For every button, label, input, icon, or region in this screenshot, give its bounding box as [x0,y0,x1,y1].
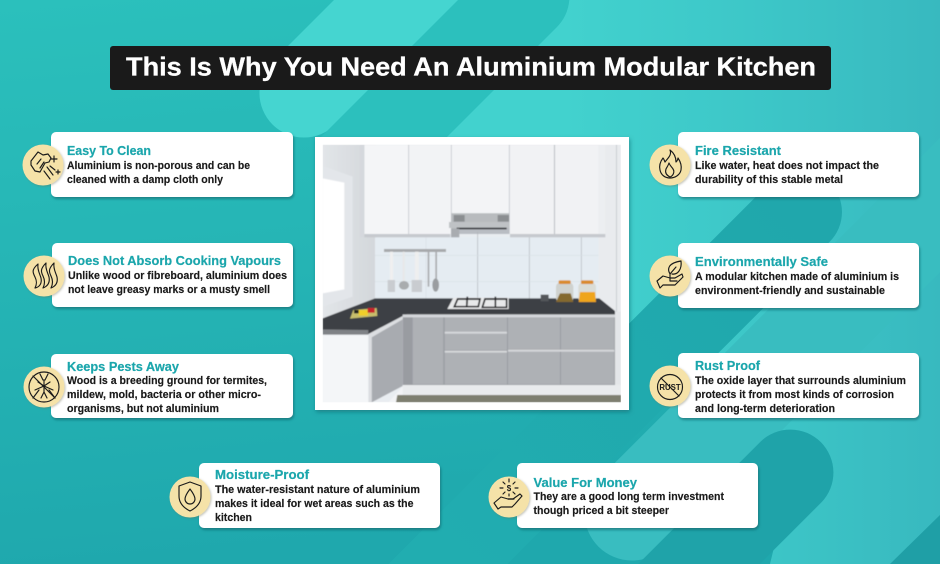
icon: no rust [658,374,682,400]
icon: hand with coin [494,479,522,509]
text: rust proof: The oxide layer that surrounds aluminium [695,375,906,387]
heading: easy to clean: Easy To Clean [67,143,151,158]
title: This Is Why You Need An Aluminium Modular Kitchen [126,52,816,82]
text: moisture-proof [215,484,420,524]
text: rust proof: and long-term deterioration [695,403,835,415]
text: fire resistant: Like water, heat does not impact the [695,160,879,172]
text: easy to clean: Aluminium is non-porous and can be [67,160,250,172]
icon: hand with coin: $ [507,484,512,493]
text: does not absorb cooking vapours: not leave greasy marks or a musty smell [68,284,270,296]
heading: keeps pests away: Keeps Pests Away [67,359,180,374]
card: fire resistant [650,132,919,197]
heading: moisture-proof: Moisture-Proof [215,467,310,482]
card: environmentally safe [650,243,919,308]
card: moisture-proof [170,463,440,528]
card: keeps pests away [24,354,293,418]
text: keeps pests away: organisms, but not aluminium [67,403,219,415]
text: moisture-proof: makes it ideal for wet areas such as the [215,498,414,510]
text: easy to clean: cleaned with a damp cloth only [67,174,223,186]
text: moisture-proof: kitchen [215,512,252,524]
text: value for money: though priced a bit steeper [534,505,670,517]
text: value for money: They are a good long term investment [534,491,724,503]
text: does not absorb cooking vapours: Unlike wood or fibreboard, aluminium does [68,270,287,282]
text: value for money [534,491,724,517]
text: environmentally safe [695,271,899,297]
card: does not absorb cooking vapours [24,243,293,307]
icon: hand wiping [31,152,60,179]
text: environmentally safe: A modular kitchen made of aluminium is [695,271,899,283]
text: rust proof [695,375,906,415]
card: rust proof [650,353,919,418]
title [110,46,831,90]
card: easy to clean [22,132,293,197]
icon: no rust: RUST [659,383,681,392]
photo: aluminium modular kitchen [315,137,629,410]
heading: environmentally safe: Environmentally Safe [695,254,828,269]
text: fire resistant [695,160,879,186]
heading: value for money: Value For Money [534,475,638,490]
icon: shield with water drop [179,482,201,511]
heading: rust proof: Rust Proof [695,358,761,373]
text: rust proof: protects it from most kinds of corrosion [695,389,894,401]
text: easy to clean [67,160,250,186]
card: value for money [488,463,758,528]
icon: flame [660,150,681,178]
icon: mosquito crossed out [29,372,59,402]
icon: plant in hand [657,261,683,288]
text: keeps pests away [67,375,267,415]
text: environmentally safe: environment-friendly and sustainable [695,285,885,297]
text: fire resistant: durability of this stable metal [695,174,843,186]
text: keeps pests away: mildew, mold, bacteria or other micro- [67,389,261,401]
text: does not absorb cooking vapours [68,270,287,296]
text: moisture-proof: The water-resistant nature of aluminium [215,484,420,496]
icon: steam [33,263,57,288]
heading: does not absorb cooking vapours: Does Not Absorb Cooking Vapours [68,253,281,268]
heading: fire resistant: Fire Resistant [695,143,782,158]
text: keeps pests away: Wood is a breeding ground for termites, [67,375,267,387]
